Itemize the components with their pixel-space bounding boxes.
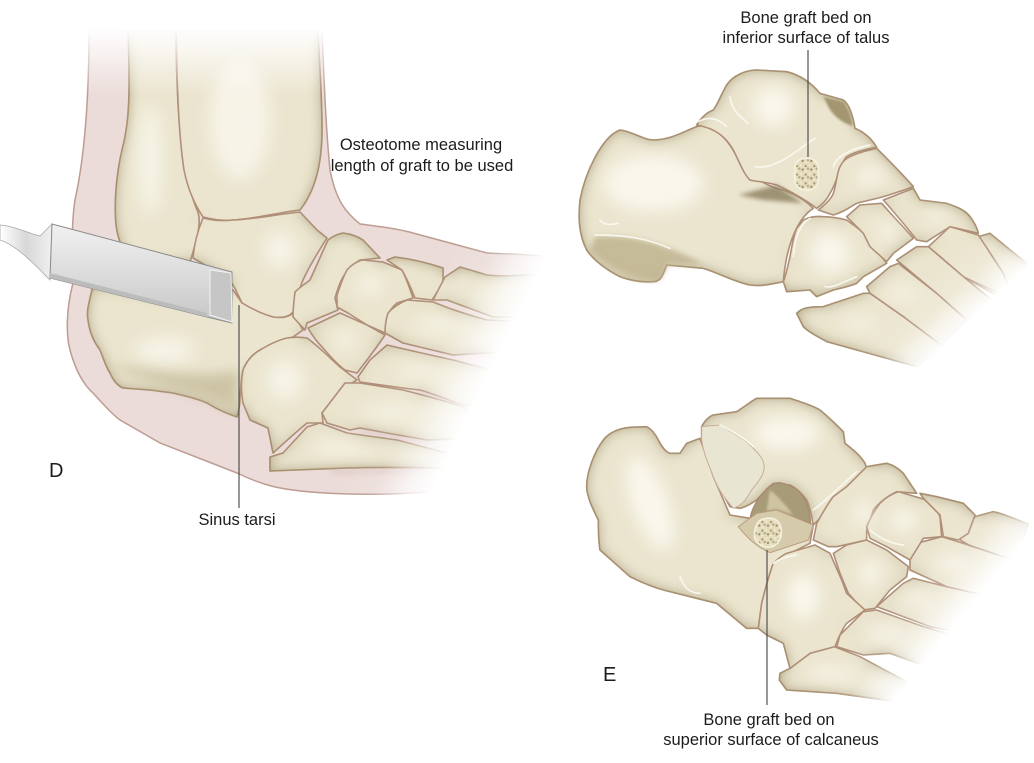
panel: E top foot, inferior surface of talus <box>579 70 1034 393</box>
white highlight lines <box>680 425 903 593</box>
fibular facet shadow <box>823 97 853 126</box>
inner opening light wedge <box>767 490 793 515</box>
label: osteotome measuring <box>331 136 513 175</box>
fade at toes <box>770 227 1034 393</box>
bottom foot highlights <box>616 417 973 679</box>
medial talar facet <box>702 425 764 508</box>
skin outline <box>67 30 550 494</box>
bones of ankle and foot <box>87 30 550 471</box>
blade end facet <box>210 270 232 322</box>
calcaneus underside shadow <box>590 236 703 281</box>
graft bed on talus <box>795 158 818 190</box>
osteotome <box>0 224 232 323</box>
label: calcaneus bed <box>663 711 879 749</box>
label: calcaneus bed: superior surface of calcaneus <box>663 731 879 749</box>
white fade at toes <box>250 200 565 510</box>
white highlight lines <box>595 97 870 287</box>
graft bed on calcaneus <box>754 518 781 547</box>
bone highlights <box>135 60 468 454</box>
label: talus bed: inferior surface of talus <box>723 29 889 47</box>
label: sinus tarsi: Sinus tarsi <box>198 511 276 529</box>
calcaneus lower shading <box>110 365 240 412</box>
panel: E bottom foot, superior surface of calcaneus <box>587 398 1034 723</box>
blade lower bevel <box>50 273 207 317</box>
panel letter E: E <box>603 664 616 686</box>
gaps between metatarsals <box>330 350 510 472</box>
top foot bones <box>579 70 1027 367</box>
label: talus bed: Bone graft bed on <box>740 9 872 27</box>
white fade at top of leg <box>60 0 350 95</box>
fade at toes <box>737 510 1034 723</box>
leader line: calcaneus bed <box>766 550 768 705</box>
calcaneal facet <box>738 510 813 553</box>
bottom foot bones <box>587 398 1028 702</box>
label: talus bed <box>723 9 889 47</box>
panel letter D: D <box>49 460 63 482</box>
sinus tarsi opening <box>750 483 811 523</box>
label: calcaneus bed: Bone graft bed on <box>703 711 835 729</box>
leader line: talus bed <box>807 50 809 157</box>
sinus groove shadow <box>738 185 803 203</box>
panel: D lateral ankle with osteotome <box>60 0 565 510</box>
osteotome handle <box>0 224 52 280</box>
label: osteotome measuring: Osteotome measuring <box>340 136 502 154</box>
top foot highlights <box>603 87 948 328</box>
osteotome blade <box>50 224 232 323</box>
label: osteotome measuring: length of graft to be used <box>331 157 513 175</box>
leader line: sinus tarsi <box>238 305 240 508</box>
